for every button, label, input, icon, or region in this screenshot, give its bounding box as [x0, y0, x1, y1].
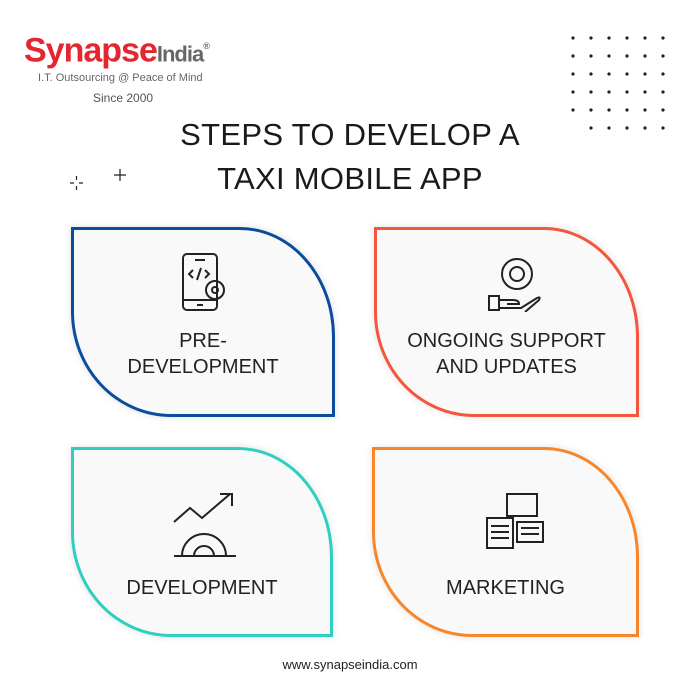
label: [407, 330, 606, 378]
title: TAXI MOBILE APP: [217, 161, 483, 196]
card: marketing: [372, 447, 639, 637]
logo: I.T. Outsourcing @ Peace of Mind: [38, 72, 203, 84]
label: [127, 330, 279, 378]
logo: [24, 31, 210, 105]
label: DEVELOPMENT: [126, 577, 278, 599]
label: MARKETING: [446, 577, 565, 599]
logo: Since 2000: [93, 91, 153, 105]
logo: SynapseIndia®: [24, 31, 209, 69]
plus decorations: [70, 169, 126, 190]
icon: gear with growth arrow: [173, 493, 236, 557]
footer url: www.synapseindia.com: [282, 657, 418, 672]
dot grid decoration: [571, 36, 665, 130]
card: development: [71, 447, 333, 637]
icon: marketing screens: [486, 493, 544, 549]
label: AND UPDATES: [436, 356, 577, 378]
label: ONGOING SUPPORT: [407, 330, 606, 352]
card: pre-development: [71, 227, 335, 417]
label: DEVELOPMENT: [127, 356, 279, 378]
card: ongoing support: [374, 227, 639, 417]
icon: phone with gear: [182, 253, 225, 311]
title: [180, 117, 520, 196]
label: PRE-: [179, 330, 227, 352]
icon: hand with gear: [488, 258, 541, 312]
title: STEPS TO DEVELOP A: [180, 117, 520, 152]
